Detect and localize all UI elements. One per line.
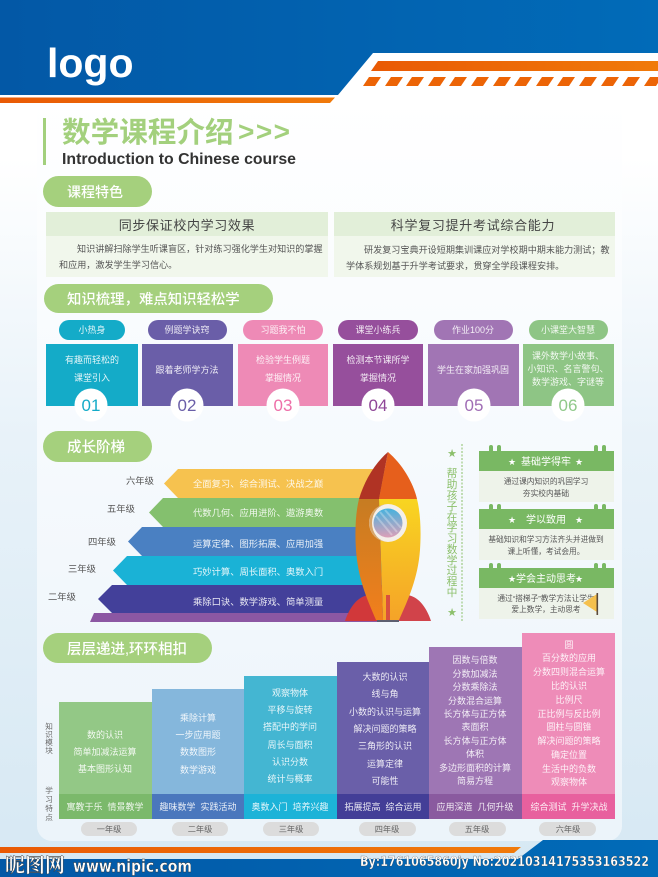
step 06: [523, 320, 614, 422]
step 04: [333, 320, 423, 422]
column: 四年级: 可能性: [371, 775, 399, 786]
growth ladder arrows: 运算定律、图形拓展、应用加强: [193, 538, 323, 549]
side vertical caption: 子: [447, 500, 458, 513]
column: 二年级: 趣味数学 实践活动: [159, 801, 237, 812]
column: 六年级: 圆柱与圆锥: [546, 721, 592, 732]
grade labels: 三年级: [68, 563, 96, 574]
step 05: 作业100分: [452, 324, 494, 335]
row labels: 习: [45, 795, 53, 804]
step 02: 跟着老师学方法: [155, 364, 219, 375]
column: 一年级: [59, 702, 152, 836]
step 05: 学生在家加强巩固: [437, 364, 509, 375]
column: 六年级: 综合测试 升学决战: [530, 801, 608, 812]
side vertical caption: ★: [447, 447, 457, 460]
column: 二年级: 一步应用题: [175, 729, 221, 740]
panel: feature card right: 科学复习提升考试综合能力: [391, 218, 555, 233]
column: 五年级: [429, 647, 522, 836]
side vertical caption: 在: [447, 511, 458, 524]
column: 五年级: 应用深造 几何升级: [436, 801, 514, 812]
side vertical caption: 中: [447, 586, 457, 599]
row labels: 特: [45, 803, 53, 813]
column: 三年级: 认识分数: [272, 756, 308, 767]
panel: feature card right: 学体系规划基于升学考试要求，贯穿全学段课程安排。: [346, 260, 564, 271]
heading: 层层递进: [43, 633, 212, 663]
column: 五年级: 多边形面积的计算: [439, 762, 511, 773]
logo: logo: [47, 40, 134, 86]
growth ladder arrows: 全面复习、综合测试、决战之巅: [193, 478, 323, 489]
column: 四年级: 解决问题的策略: [353, 723, 417, 734]
heading: 知识梳理: [44, 284, 273, 313]
side vertical caption: 帮: [447, 467, 458, 480]
column: 五年级: 分数加减法: [452, 668, 498, 679]
step 01: 小热身: [78, 324, 106, 335]
card: 学以致用: ★: [575, 516, 583, 526]
column: 六年级: 圆: [564, 640, 574, 650]
side vertical caption: 学: [447, 553, 458, 567]
column: 一年级: 一年级: [97, 824, 121, 834]
column: 二年级: 二年级: [188, 824, 212, 834]
title block: 数学课程介绍: [62, 117, 234, 149]
column: 六年级: 观察物体: [551, 776, 587, 787]
column: 五年级: 长方体与正方体: [443, 708, 507, 719]
heading: 知识梳理: 知识梳理，难点知识轻松学: [67, 290, 240, 308]
step 05: [428, 320, 519, 422]
side vertical caption: ★: [447, 606, 457, 619]
step 02: 例题学诀窍: [164, 324, 210, 335]
card: 基础学得牢: 通过课内知识的巩固学习: [504, 476, 588, 486]
card: 学以致用: 基础知识和学习方法齐头并进做到: [488, 534, 604, 544]
column: 四年级: 拓展提高 综合运用: [344, 801, 422, 812]
column: 一年级: 寓教于乐 情景教学: [66, 801, 144, 812]
side vertical caption: 学: [447, 520, 458, 534]
column: 六年级: 比的认识: [551, 680, 587, 691]
column: 五年级: 分数混合运算: [448, 695, 502, 706]
grade labels: 六年级: [126, 475, 154, 486]
header banner: [0, 0, 658, 103]
panel: feature card left: [46, 212, 328, 277]
column: 五年级: 五年级: [465, 824, 489, 834]
column: 四年级: 四年级: [375, 824, 399, 834]
column: 六年级: 六年级: [556, 824, 580, 834]
step 04: 检测本节课所学: [346, 354, 410, 365]
step 04: 04: [369, 396, 387, 415]
step 03: 03: [274, 396, 292, 415]
step 03: [238, 320, 328, 422]
column: 三年级: 周长与面积: [267, 739, 313, 750]
step 06: 06: [559, 396, 577, 415]
step 01: [46, 320, 138, 422]
title block: Introduction to Chinese course: [62, 151, 296, 168]
panel: page content: [37, 100, 622, 841]
column: 三年级: 观察物体: [272, 687, 308, 698]
column: 二年级: 数学游戏: [180, 764, 216, 775]
step 05: 05: [465, 396, 483, 415]
heading: 课程特色: 课程特色: [67, 184, 123, 200]
footer band: [0, 840, 658, 877]
step 02: [142, 320, 233, 422]
heading: 成长阶梯: [43, 431, 152, 462]
step 04: 掌握情况: [360, 372, 396, 383]
side vertical caption: [447, 444, 462, 622]
step 01: 课堂引入: [74, 372, 110, 383]
growth ladder arrows: [90, 469, 385, 622]
grade labels: [48, 475, 154, 602]
watermark left: www.nipic.com: [73, 857, 192, 877]
card: 学会主动思考: 学会主动思考: [516, 572, 576, 585]
column: 一年级: 基本图形认知: [78, 763, 132, 774]
step 06: 课外数学小故事、: [532, 350, 604, 361]
heading: 成长阶梯: 成长阶梯: [67, 438, 125, 456]
step 03: 检验学生例题: [256, 354, 310, 365]
column: 五年级: 长方体与正方体: [443, 735, 507, 746]
card: 学会主动思考: ★: [508, 575, 516, 585]
column: 六年级: 解决问题的策略: [537, 735, 601, 746]
growth ladder arrows: 巧妙计算、周长面积、奥数入门: [193, 566, 323, 577]
column: 三年级: 三年级: [279, 824, 303, 834]
card: 基础学得牢: ★: [508, 458, 516, 468]
column: 一年级: 简单加减法运算: [73, 746, 137, 757]
card: 学以致用: 学以致用: [526, 513, 566, 526]
step 01: 01: [82, 396, 100, 415]
side vertical caption: 孩: [447, 489, 458, 502]
column: 六年级: 确定位置: [551, 749, 587, 760]
side vertical caption: 助: [447, 477, 458, 491]
column: 二年级: 数数图形: [180, 746, 216, 757]
heading: 课程特色: [43, 176, 152, 207]
card: 学会主动思考: 通过“搭梯子”教学方法让学生: [497, 593, 595, 603]
icon: rocket: [345, 452, 431, 622]
column: 六年级: [522, 633, 615, 836]
heading: 层层递进: 层层递进,环环相扣: [67, 640, 187, 658]
step 01: 有趣而轻松的: [65, 354, 119, 365]
column: 五年级: 简易方程: [457, 775, 493, 786]
row labels: 块: [45, 745, 53, 755]
column: 三年级: 平移与旋转: [267, 704, 313, 715]
side vertical caption: 数: [447, 543, 458, 556]
panel: feature card left: 同步保证校内学习效果: [119, 218, 255, 233]
grade labels: 四年级: [88, 536, 116, 547]
card: 学以致用: ★: [508, 516, 516, 526]
card: 基础学得牢: 夯实校内基础: [523, 488, 569, 498]
column: 六年级: 百分数的应用: [542, 652, 596, 663]
column: 三年级: 搭配中的学问: [263, 721, 317, 732]
row labels: 识: [45, 730, 53, 739]
row labels: 知: [45, 721, 53, 731]
title block: >>>: [238, 116, 290, 147]
row labels: [45, 721, 53, 822]
growth ladder arrows: 乘除口诀、数学游戏、简单测量: [193, 596, 323, 607]
grade labels: 五年级: [107, 503, 135, 514]
step 03: 掌握情况: [265, 372, 301, 383]
column: 六年级: 比例尺: [555, 694, 583, 705]
step 03: 习题我不怕: [260, 324, 306, 335]
column: 四年级: 三角形的认识: [358, 740, 412, 751]
row labels: 学: [45, 785, 53, 795]
panel: feature card left: 和应用，激发学生学习信心。: [59, 259, 177, 270]
step 06: 数学游戏、字谜等: [532, 376, 604, 387]
title block: [43, 116, 296, 168]
panel: feature card left: 知识讲解扫除学生听课盲区，针对练习强化学生对知识的掌握: [77, 243, 323, 254]
column: 四年级: 大数的认识: [362, 671, 408, 682]
side vertical caption: 程: [447, 575, 458, 588]
column: 二年级: [152, 689, 244, 836]
step 06: 小知识、名言警句、: [527, 363, 609, 374]
icon: flag: [583, 593, 598, 615]
card: 学会主动思考: ★: [575, 575, 583, 585]
column: 六年级: 正比例与反比例: [537, 708, 601, 719]
column: 二年级: 乘除计算: [180, 712, 216, 723]
card: 学会主动思考: [479, 563, 614, 619]
column: 三年级: [244, 676, 337, 836]
column: 四年级: 小数的认识与运算: [349, 706, 421, 717]
step 04: 课堂小练兵: [355, 324, 401, 335]
step 02: 02: [178, 396, 196, 415]
card: 基础学得牢: [479, 445, 614, 502]
column: 一年级: 数的认识: [87, 729, 123, 740]
column: 五年级: 因数与倍数: [452, 654, 498, 665]
side vertical caption: 过: [447, 564, 458, 577]
card: 学以致用: 课上听懂，考试会用。: [508, 546, 584, 556]
column: 五年级: 分数乘除法: [452, 681, 498, 692]
card: 基础学得牢: 基础学得牢: [521, 455, 571, 468]
grade labels: 二年级: [48, 591, 76, 602]
column: 三年级: 奥数入门 培养兴趣: [251, 801, 329, 812]
column: 四年级: 线与角: [371, 688, 399, 699]
column: 五年级: 体积: [466, 748, 484, 759]
watermark left: [5, 849, 192, 877]
card: 学以致用: [479, 504, 614, 560]
row labels: 点: [45, 813, 53, 822]
panel: feature card right: 研发复习宝典开设短期集训课应对学校期中期末能力测试；教: [364, 244, 610, 255]
column: 六年级: 分数四则混合运算: [533, 666, 605, 677]
column: 三年级: 统计与概率: [267, 773, 313, 784]
card: 学会主动思考: 爱上数学，主动思考: [511, 604, 581, 614]
row labels: 模: [45, 737, 53, 747]
growth ladder arrows: 代数几何、应用进阶、遨游奥数: [193, 507, 324, 518]
column: 四年级: 运算定律: [367, 758, 403, 769]
panel: feature card right: [334, 212, 615, 277]
column: 四年级: [337, 662, 429, 836]
side vertical caption: 习: [447, 533, 457, 545]
column: 五年级: 表面积: [461, 721, 489, 732]
column: 六年级: 生活中的负数: [542, 763, 596, 774]
card: 基础学得牢: ★: [575, 458, 583, 468]
step 06: 小课堂大智慧: [541, 324, 595, 335]
